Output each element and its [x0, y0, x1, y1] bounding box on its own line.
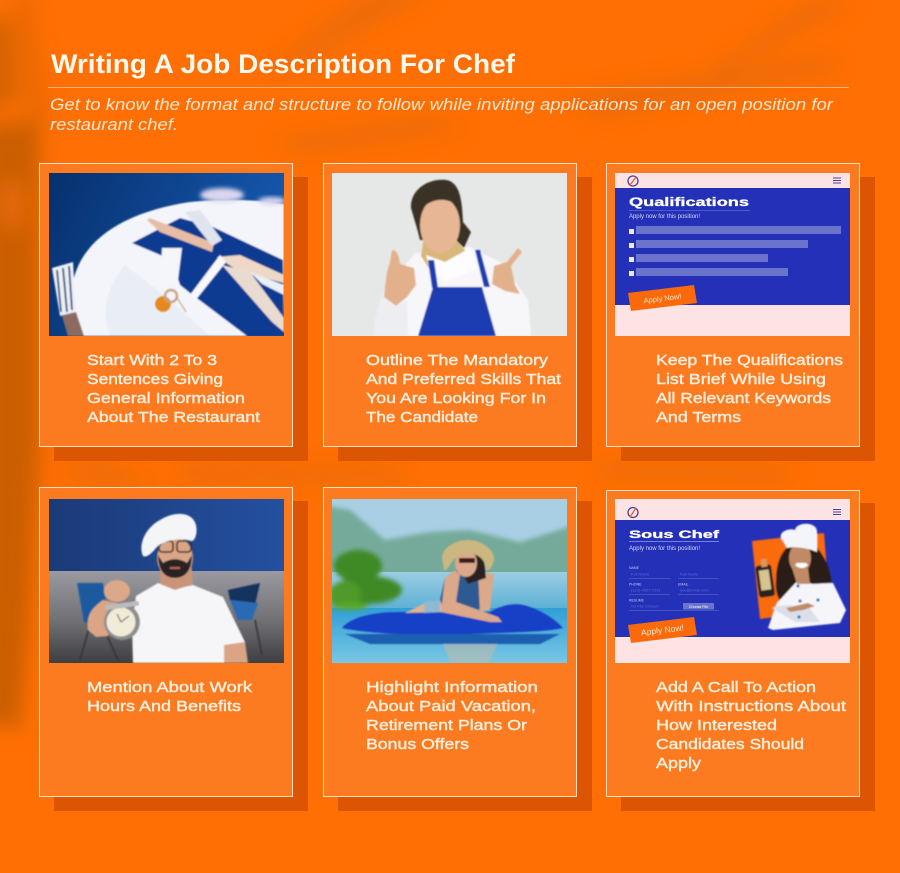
- icon: stopwatch logo: [628, 176, 638, 186]
- card 1 shadow: [54, 177, 308, 461]
- icon: menu: [833, 178, 841, 183]
- panel: card 2 skills: [324, 164, 592, 461]
- photo: woman on float: [320, 499, 575, 663]
- card 6 text: With Instructions About: [656, 698, 847, 715]
- panel: card 4 work hours: [40, 488, 308, 811]
- card 1 text: Sentences Giving: [87, 371, 223, 388]
- card 5 text: [366, 679, 538, 753]
- card 1 text: About The Restaurant: [87, 409, 261, 426]
- form fields: NAME: [629, 566, 640, 570]
- card 3 shadow: [621, 177, 875, 461]
- subtitle: Get to know the format and structure to follow while inviting applications for an open position for: [50, 96, 835, 114]
- card 5 box: [324, 488, 576, 796]
- card 6 text: [656, 679, 847, 772]
- card 6 text: Candidates Should: [656, 736, 804, 753]
- card 2 text: You Are Looking For In: [366, 390, 546, 407]
- card 6 text: Add A Call To Action: [656, 679, 816, 696]
- panel: card 1 general information: [40, 164, 308, 461]
- card 3 text: Keep The Qualifications: [656, 352, 843, 369]
- mockup: sous chef page: [615, 499, 850, 663]
- card 5 text: Highlight Information: [366, 679, 538, 696]
- card 2 box: [324, 164, 576, 446]
- form fields: Choose File: [689, 605, 708, 609]
- photo: chef with bottle: [752, 524, 846, 630]
- form fields: PHONE: [629, 582, 642, 586]
- form fields: Full Name: [680, 572, 699, 576]
- card 1 text: Start With 2 To 3: [87, 352, 217, 369]
- card 3 text: All Relevant Keywords: [656, 390, 831, 407]
- form fields: [629, 566, 719, 610]
- icon: menu: [833, 510, 841, 514]
- card 2 shadow: [338, 177, 592, 461]
- subtitle: restaurant chef.: [50, 116, 178, 134]
- panel: card 5 benefits: [320, 488, 592, 811]
- panel: card 3 qualifications: [606, 164, 875, 461]
- card 5 text: Bonus Offers: [366, 736, 469, 753]
- card 3 box: [606, 164, 860, 446]
- card 4 text: Mention About Work: [87, 679, 253, 696]
- card 1 box: [40, 164, 292, 446]
- card 2 text: The Candidate: [366, 409, 478, 426]
- mockup: qualifications page: Apply now for this position!: [629, 214, 700, 220]
- card 1 text: General Information: [87, 390, 245, 407]
- card 2 text: And Preferred Skills That: [366, 371, 562, 388]
- card 6 shadow: [621, 503, 875, 811]
- card 3 text: And Terms: [656, 409, 741, 426]
- card 4 box: [40, 488, 292, 796]
- card 5 text: About Paid Vacation,: [366, 698, 536, 715]
- card 4 text: Hours And Benefits: [87, 698, 241, 715]
- mockup: sous chef page: Apply now for this position!: [629, 546, 700, 552]
- card 3 text: [656, 352, 843, 426]
- panel: card 6 call to action: [606, 490, 875, 811]
- card 2 text: Outline The Mandatory: [366, 352, 549, 369]
- card 3 text: List Brief While Using: [656, 371, 826, 388]
- apply button: Apply Now!: [640, 622, 684, 638]
- photo: chef with clock: [49, 499, 284, 663]
- title: Writing A Job Description For Chef: [51, 49, 516, 79]
- form fields: RESUME: [629, 598, 645, 602]
- photo: plate and napkin: [49, 173, 286, 336]
- photo: chef thumbs up: [332, 173, 567, 336]
- form fields: you@email.com: [680, 588, 709, 592]
- mockup heading: Sous Chef: [629, 529, 720, 541]
- subtitle: [50, 96, 835, 134]
- card 6 text: Apply: [656, 755, 702, 772]
- card 5 shadow: [338, 501, 592, 811]
- card 4 shadow: [54, 501, 308, 811]
- card 2 text: [366, 352, 562, 426]
- form fields: (123) 4567-7291: [631, 588, 661, 592]
- apply button: [628, 617, 697, 643]
- card 6 text: How Interested: [656, 717, 777, 734]
- list bars: [636, 226, 841, 276]
- apply button: [628, 285, 697, 311]
- form fields: Full Name: [631, 572, 650, 576]
- card 6 box: [606, 490, 860, 796]
- apply button: Apply Now!: [643, 292, 682, 305]
- card 4 text: [87, 679, 253, 715]
- card 1 text: [87, 352, 261, 426]
- mockup: qualifications page: [615, 173, 850, 336]
- card 5 text: Retirement Plans Or: [366, 717, 527, 734]
- form fields: No File Chosen: [631, 604, 659, 608]
- mockup heading: Qualifications: [629, 195, 749, 209]
- icon: stopwatch logo: [628, 508, 638, 518]
- form fields: EMAIL: [678, 582, 689, 586]
- title rule: [48, 87, 849, 88]
